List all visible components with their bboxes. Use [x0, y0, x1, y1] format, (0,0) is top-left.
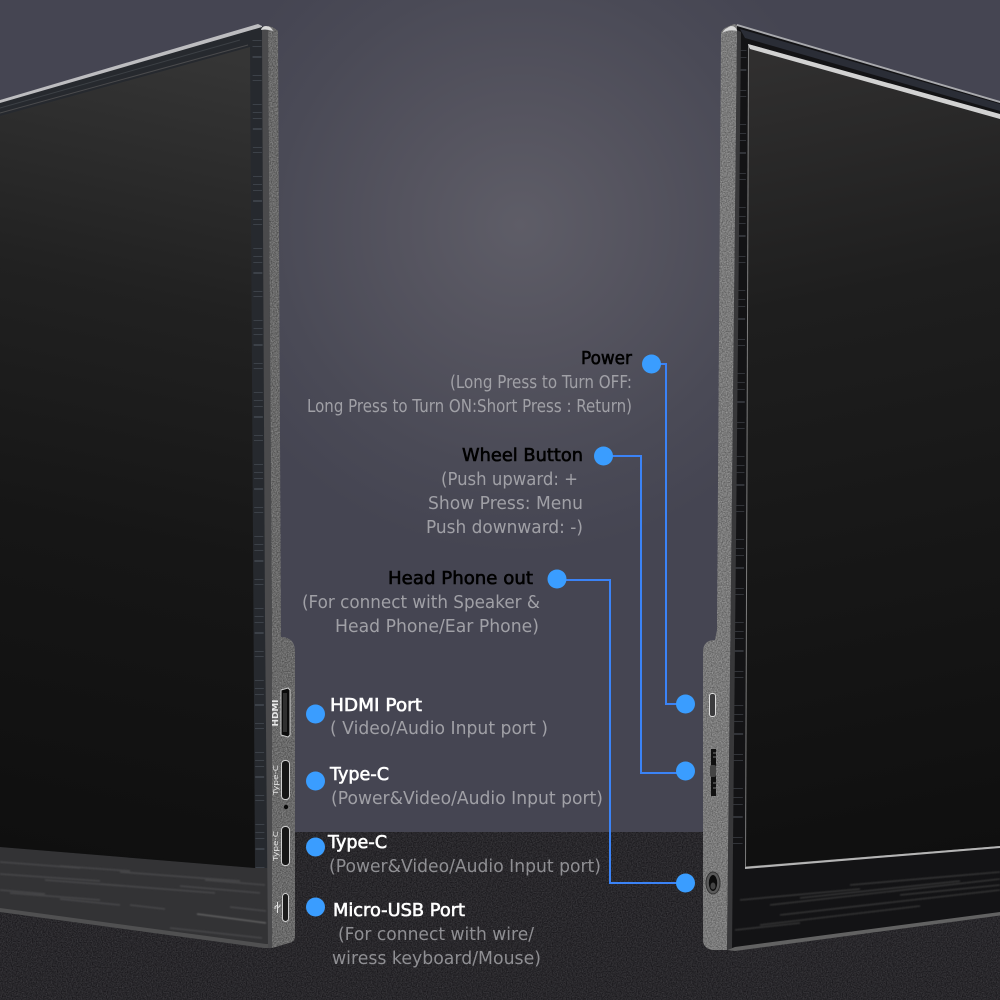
Wheel button: [710, 749, 716, 796]
marker dots: [306, 354, 695, 916]
indicator hole: [284, 805, 288, 809]
text: Head Phone out: Head Phone/Ear Phone): [335, 617, 539, 637]
background: dark floor: [0, 832, 1000, 1000]
text: Type-C one: Type-C: [329, 765, 389, 785]
line: power: [651, 364, 685, 704]
Type-C label two: Type-C: [272, 831, 280, 862]
right screen top light band: [748, 44, 1000, 119]
right monitor side bevel: [727, 30, 741, 950]
dot: Type-C one: [306, 772, 325, 790]
text: HDMI Port: HDMI Port: [330, 696, 422, 716]
left bottom bezel brushed streaks: [0, 862, 266, 938]
left monitor bottom lip: [0, 908, 272, 948]
right corner highlight: [722, 26, 737, 33]
left monitor: [0, 24, 295, 948]
right monitor top bezel band: [740, 29, 1000, 111]
right monitor side edge: [703, 24, 737, 950]
right monitor screen: [746, 48, 1000, 866]
left monitor top and side bezel: [0, 25, 272, 948]
HDMI port: [281, 688, 290, 737]
line: wheel button: [603, 456, 685, 773]
text: Power: Power: [581, 349, 633, 369]
Headphone jack: [706, 872, 720, 894]
text: Type-C two: Type-C: [327, 833, 387, 853]
left corner highlight: [261, 26, 273, 31]
right screen bottom light line: [745, 846, 1000, 869]
text: Wheel Button: (Push upward: +: [441, 470, 578, 490]
text: Power: (Long Press to Turn OFF:: [450, 373, 632, 393]
text: Power: [307, 349, 633, 417]
text: Type-C two: [327, 833, 601, 877]
Power button slot: [710, 694, 716, 716]
text: Micro-USB Port: (For connect with wire/: [338, 925, 534, 945]
text: Head Phone out: Head Phone out: [388, 569, 533, 589]
dot: headphone label: [548, 570, 566, 588]
Micro-USB port: [282, 894, 288, 922]
line: headphone: [557, 580, 685, 883]
left monitor side bevel: [262, 30, 272, 948]
text: Micro-USB Port: Micro-USB Port: [333, 901, 465, 921]
Type-C port two: [282, 826, 290, 866]
icon: USB symbol: [275, 902, 280, 913]
text: Type-C one: [329, 765, 603, 809]
right side bezel brushed dashes: [737, 50, 741, 865]
left side bezel brushed dashes: [257, 40, 260, 868]
left monitor side edge: [268, 26, 295, 948]
left monitor top bezel highlight: [0, 24, 262, 103]
connector lines: [557, 364, 685, 883]
text: Micro-USB Port: [332, 901, 541, 969]
dot: wheel label: [594, 446, 613, 466]
dot: Type-C two: [306, 838, 325, 856]
text: Wheel Button: [426, 446, 583, 538]
dot: power port: [676, 694, 695, 714]
text: Power: Long Press to Turn ON:Short Press : Return): [307, 397, 632, 417]
dot: headphone port: [676, 874, 695, 892]
text: Wheel Button: Show Press: Menu: [428, 494, 583, 514]
text: Type-C one: (Power&Video/Audio Input port): [331, 789, 603, 809]
right monitor: [703, 24, 1000, 951]
right monitor top highlight: [737, 24, 1000, 103]
text: Head Phone out: (For connect with Speaker &: [302, 593, 540, 613]
text: Head Phone out: [302, 569, 540, 637]
text: HDMI Port: [330, 696, 548, 739]
left monitor screen: [0, 47, 255, 868]
text: Type-C two: (Power&Video/Audio Input port): [329, 857, 601, 877]
dot: Micro-USB: [306, 898, 325, 916]
right bottom bezel brushed streaks: [735, 872, 1000, 930]
dot: power label: [642, 354, 661, 374]
dot: HDMI: [306, 704, 325, 724]
text: HDMI Port: ( Video/Audio Input port ): [330, 719, 548, 739]
dot: wheel port: [676, 762, 695, 780]
Type-C label one: Type-C: [272, 765, 280, 796]
text: Wheel Button: Push downward: -): [426, 518, 583, 538]
left bezel top stripes: [0, 40, 248, 113]
right monitor screen outline: [745, 44, 1000, 868]
text: Wheel Button: Wheel Button: [462, 446, 583, 466]
right monitor bottom lip: [727, 912, 1000, 951]
right monitor bezel: [727, 25, 1000, 950]
HDMI label: HDMI: [271, 699, 280, 726]
text: Micro-USB Port: wiress keyboard/Mouse): [332, 949, 541, 969]
Type-C port one: [282, 760, 290, 800]
left monitor bottom bezel: [0, 847, 272, 948]
